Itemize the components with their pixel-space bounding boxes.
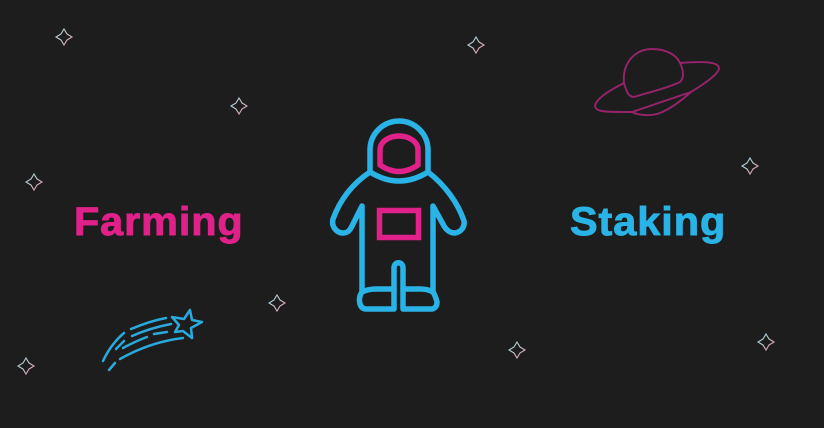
heading: Staking: Staking	[570, 199, 725, 244]
star	[56, 29, 72, 45]
star	[758, 334, 774, 350]
icon: shooting star	[103, 310, 202, 370]
icon: ringed planet	[595, 49, 719, 115]
star	[231, 98, 247, 114]
astronaut boots	[362, 289, 433, 292]
stars	[18, 29, 774, 374]
star	[18, 358, 34, 374]
star	[509, 342, 525, 358]
astronaut suit	[333, 172, 464, 309]
icon: astronaut	[333, 121, 464, 309]
astronaut chest panel	[380, 210, 418, 238]
star	[742, 158, 758, 174]
astronaut helmet	[370, 121, 428, 181]
star	[468, 37, 484, 53]
star	[269, 295, 285, 311]
star	[26, 174, 42, 190]
astronaut visor	[380, 136, 418, 172]
heading: Farming: Farming	[74, 199, 243, 244]
